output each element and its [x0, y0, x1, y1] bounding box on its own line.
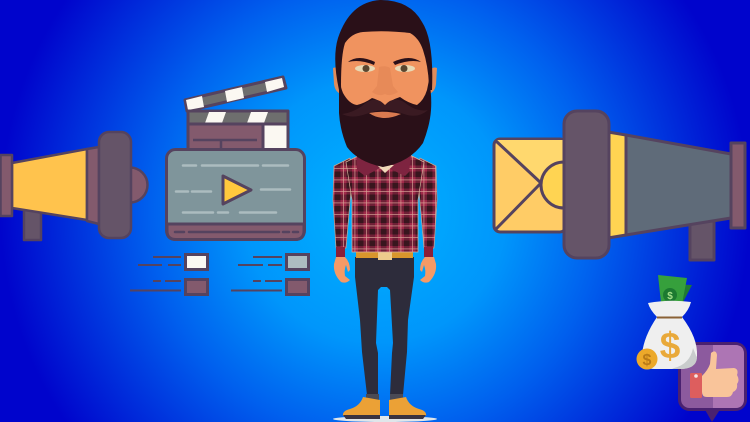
beard — [339, 80, 431, 167]
left eyebrow — [348, 58, 375, 65]
icon: right megaphone — [494, 111, 745, 260]
clapper bar — [188, 111, 288, 124]
right hand — [420, 257, 436, 283]
clapper stick — [185, 77, 286, 111]
trousers — [355, 257, 414, 395]
right cuff — [424, 247, 433, 257]
bubble tail — [704, 408, 721, 422]
screen text lines — [176, 166, 290, 212]
play button — [223, 176, 251, 204]
screen control bar — [167, 224, 304, 240]
ground shadow — [333, 416, 437, 422]
nose — [372, 66, 398, 95]
boots — [343, 397, 426, 416]
clapper body — [188, 124, 288, 152]
maroon square right — [286, 280, 308, 294]
megaphone foot — [690, 220, 714, 260]
right eye — [395, 65, 415, 72]
mouth — [369, 112, 401, 118]
megaphone flange — [0, 155, 12, 216]
figure: bearded man — [333, 0, 437, 422]
moustache — [342, 100, 428, 116]
cuff — [690, 373, 702, 398]
white square — [186, 254, 208, 270]
envelope — [494, 139, 587, 232]
neck skin — [377, 165, 394, 173]
cuff button — [694, 374, 698, 378]
coin — [636, 348, 658, 370]
belt buckle — [378, 252, 392, 260]
boot soles — [343, 415, 426, 419]
megaphone band — [87, 147, 99, 224]
megaphone foot — [24, 210, 41, 240]
face — [341, 31, 429, 138]
icon: speed lines and squares — [130, 254, 308, 294]
left sleeve — [333, 158, 351, 248]
icon: clapperboard — [166, 77, 304, 240]
maroon square left — [186, 280, 208, 294]
icon: left megaphone — [0, 132, 148, 240]
thumb hand — [702, 351, 738, 397]
bubble — [680, 344, 746, 410]
megaphone band — [608, 132, 626, 238]
collar — [357, 155, 411, 176]
icon: money bag — [636, 275, 697, 370]
bubble highlight — [713, 345, 744, 408]
left cuff — [336, 247, 345, 257]
left hand — [334, 257, 350, 283]
megaphone flange — [731, 143, 745, 228]
control bar lines — [175, 231, 298, 233]
bag tie — [657, 316, 682, 318]
ears — [333, 68, 437, 94]
dollar sign: $ — [660, 325, 681, 366]
left iris — [362, 65, 370, 72]
megaphone back — [112, 168, 148, 202]
belt — [356, 252, 413, 258]
right iris — [400, 65, 408, 72]
gray square — [286, 254, 308, 270]
right sleeve — [419, 158, 437, 248]
right eyebrow — [393, 58, 421, 65]
banknotes: $ — [667, 291, 673, 302]
hair — [335, 0, 432, 90]
bag shading — [672, 348, 697, 369]
icon: thumbs up bubble — [680, 344, 746, 422]
bag — [642, 301, 697, 369]
coin dollar sign: $ — [643, 352, 652, 369]
megaphone cone — [12, 149, 87, 220]
boot cuffs — [366, 394, 403, 400]
video screen — [166, 150, 304, 240]
left eye — [355, 65, 375, 72]
megaphone handle — [564, 111, 609, 258]
megaphone handle — [99, 132, 131, 238]
speed lines — [130, 257, 282, 290]
megaphone cone — [626, 135, 731, 235]
shirt — [346, 154, 424, 252]
